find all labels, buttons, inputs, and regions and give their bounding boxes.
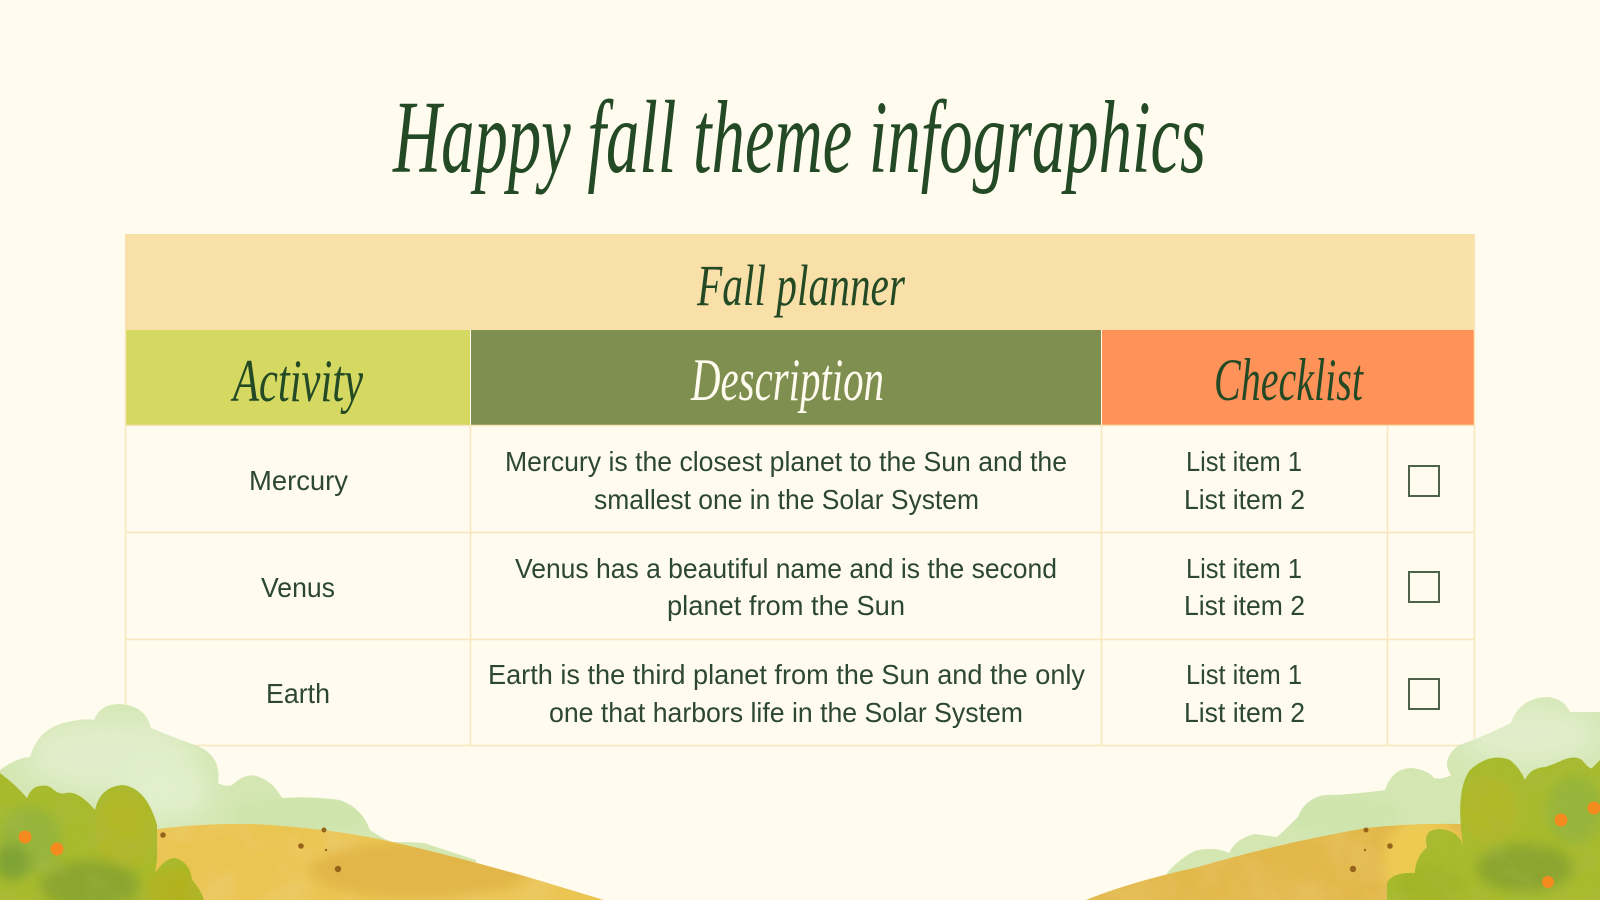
description text: smallest one in the Solar System (594, 484, 979, 515)
description text (488, 659, 1085, 728)
column header: Checklist: Checklist (1214, 347, 1364, 413)
description text: Venus has a beautiful name and is the second (515, 553, 1057, 584)
pale green background bush, left (0, 704, 476, 863)
yellow hill, right (1086, 824, 1463, 900)
row: Earth (266, 659, 1439, 728)
checklist items (1184, 553, 1305, 621)
table heading band: Fall planner: Fall planner (696, 253, 905, 318)
column header: Description (471, 330, 1101, 425)
column header: Checklist (1102, 330, 1474, 425)
illustration: right hill and bushes (1080, 690, 1600, 900)
row: Mercury (249, 446, 1439, 515)
checklist items: List item 1 (1186, 446, 1302, 477)
illustration: left hill and bushes (0, 700, 610, 900)
description text: Mercury is the closest planet to the Sun and the (505, 446, 1067, 477)
checklist items: List item 1 (1186, 659, 1302, 690)
description text: Earth is the third planet from the Sun and the only (488, 659, 1085, 690)
checkbox (1409, 466, 1439, 496)
checklist items: List item 1 (1186, 553, 1302, 584)
checklist items: List item 2 (1184, 484, 1305, 515)
column header: Activity (126, 330, 470, 425)
soil dots, left hill (160, 828, 341, 872)
soil dots, right hill (1350, 828, 1393, 872)
description text: planet from the Sun (667, 590, 905, 621)
checklist items (1184, 659, 1305, 728)
checklist items: List item 2 (1184, 590, 1305, 621)
description text: one that harbors life in the Solar System (549, 697, 1023, 728)
orange fruit, right bush (1542, 802, 1600, 888)
activity name: Venus (261, 572, 335, 603)
description text (505, 446, 1067, 515)
checkbox (1409, 679, 1439, 709)
checklist items: List item 2 (1184, 697, 1305, 728)
orange fruit, left bush (18, 830, 64, 856)
activity name: Earth (266, 678, 330, 709)
yellow hill, left (150, 820, 610, 900)
front green bush, right (1385, 750, 1600, 900)
checkbox (1409, 572, 1439, 602)
pale green background bush, right (1167, 697, 1600, 874)
checklist items (1184, 446, 1305, 515)
table: fall planner (125, 234, 1475, 746)
activity name: Mercury (249, 465, 348, 496)
row: Venus (261, 553, 1439, 621)
table heading band: Fall planner (125, 234, 1475, 330)
description text (515, 553, 1057, 621)
column header: Activity: Activity (230, 348, 363, 414)
column header: Description: Description (690, 347, 884, 413)
front green bush, left (0, 770, 210, 900)
